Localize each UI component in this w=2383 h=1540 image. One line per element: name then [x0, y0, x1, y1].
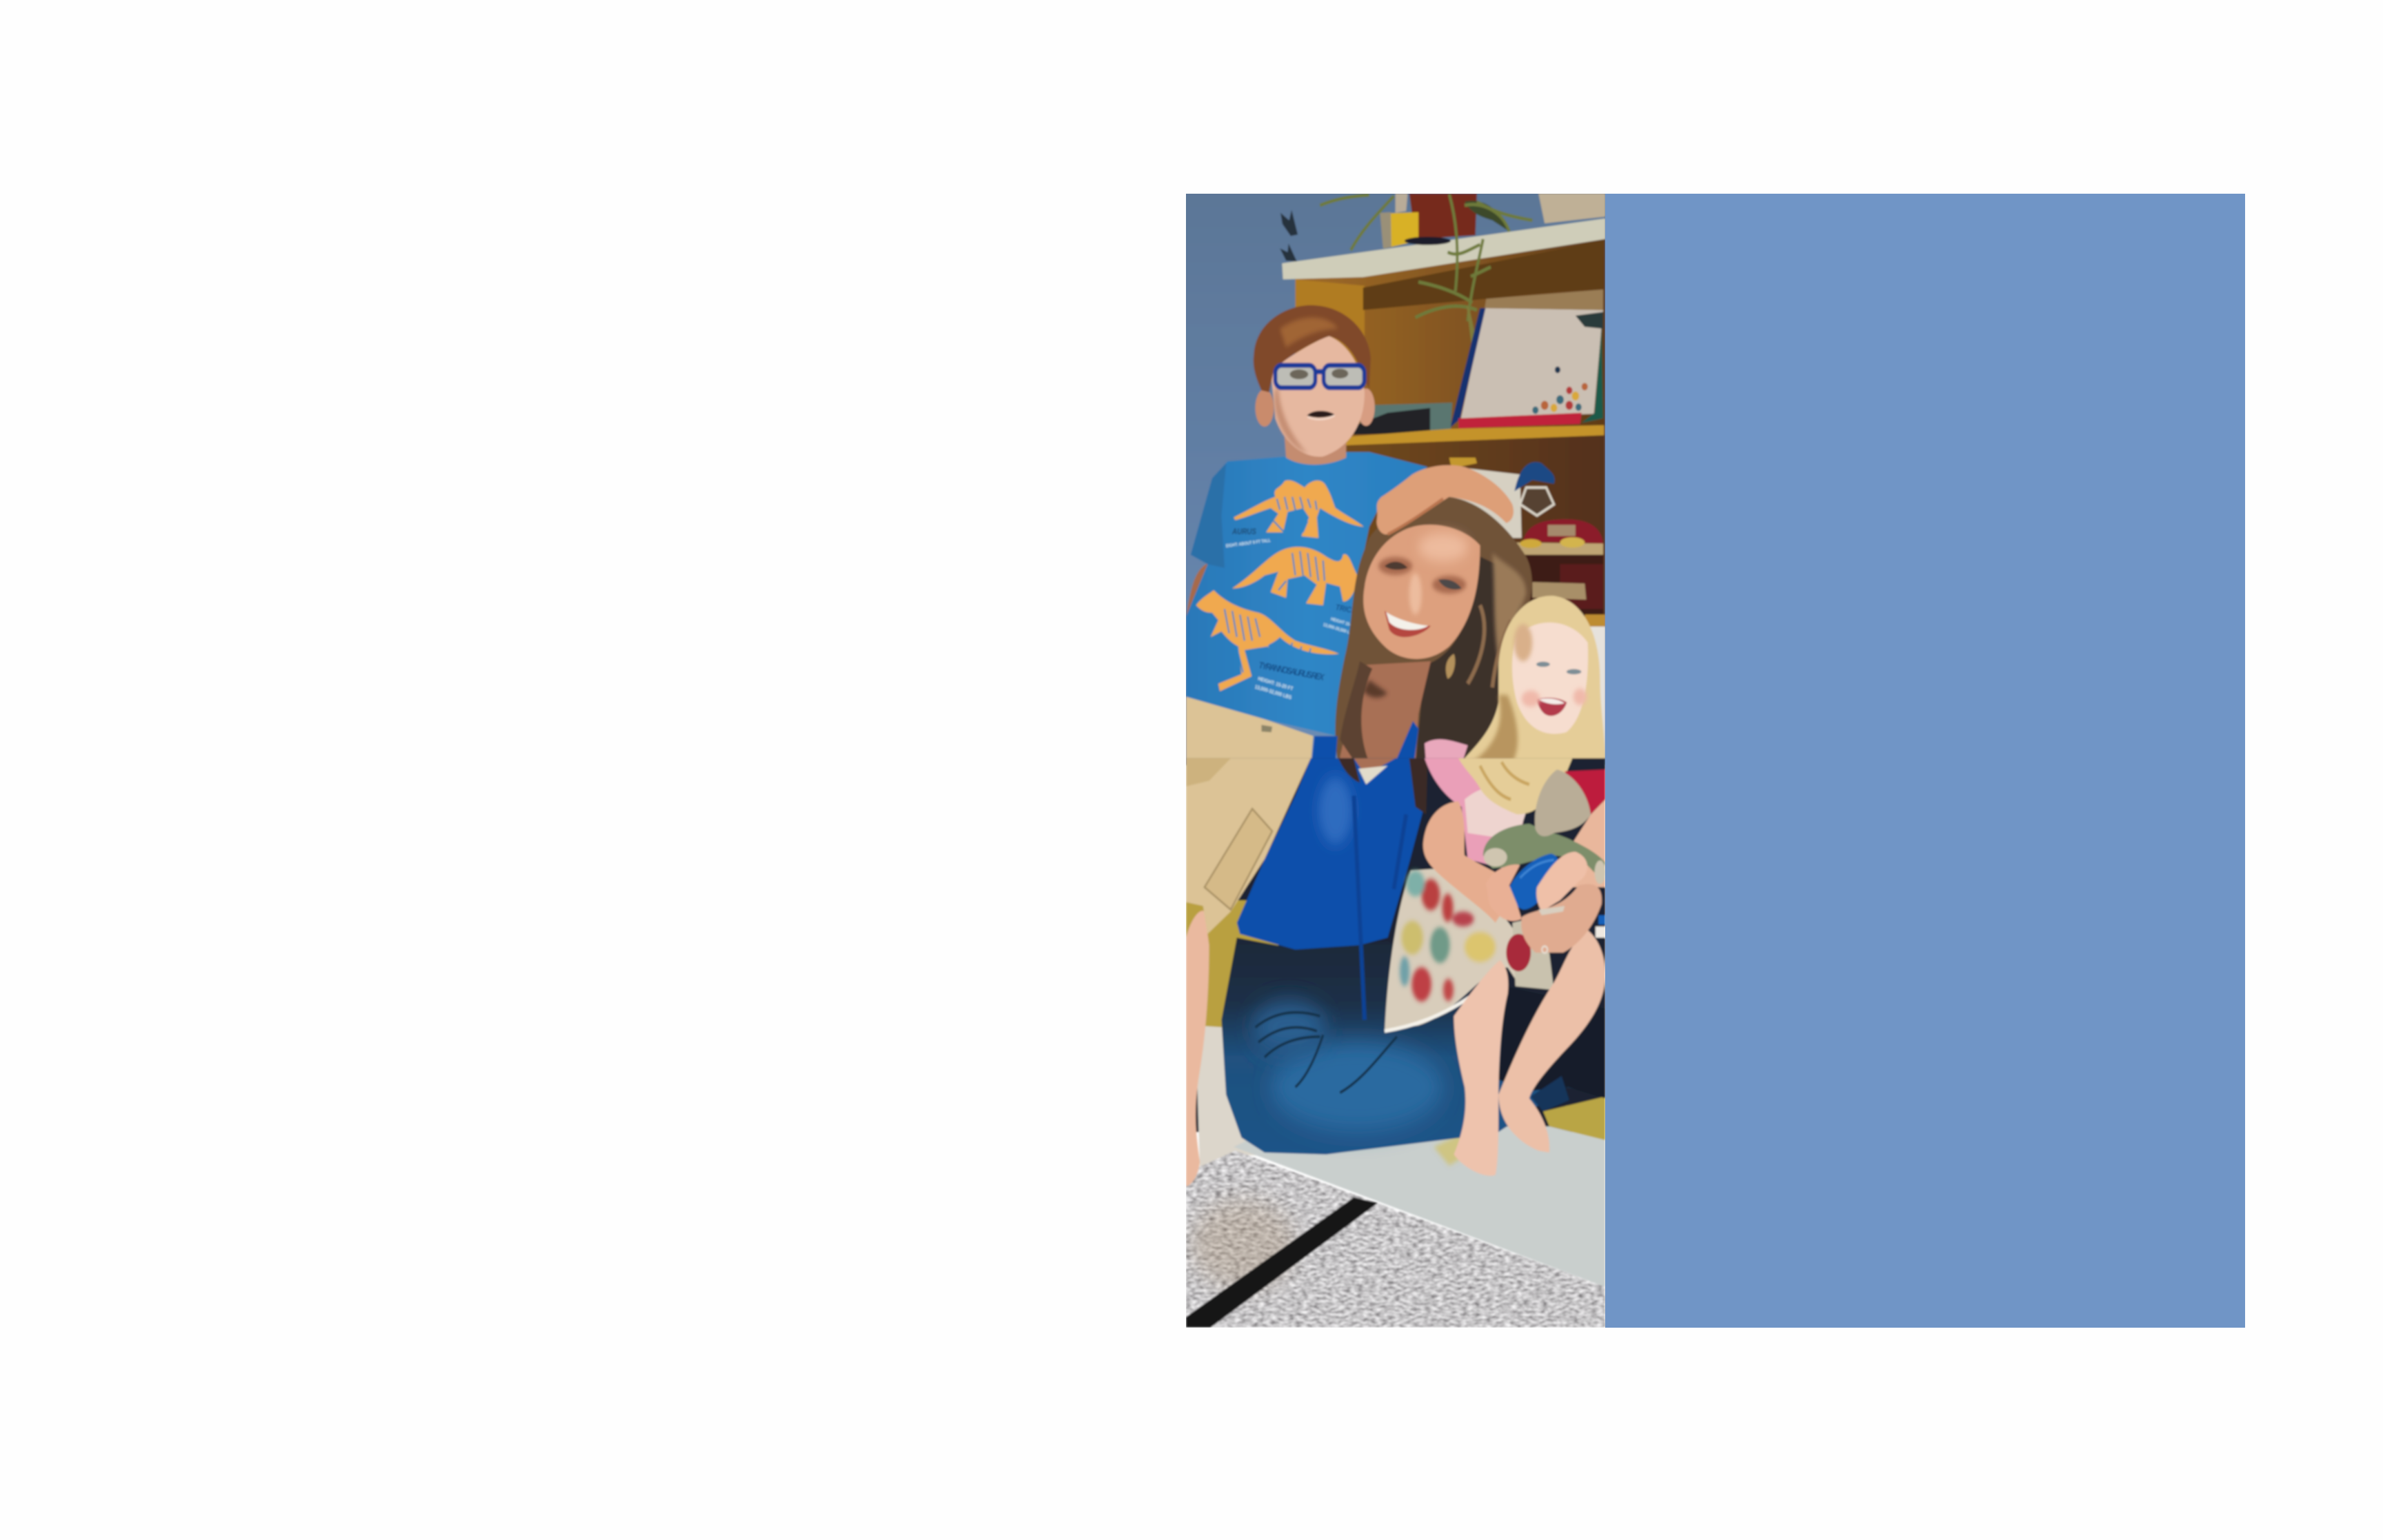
blue toy and hands: [1486, 852, 1605, 953]
mother head and hair: [1335, 497, 1532, 765]
boy: [1186, 305, 1428, 736]
panel: solid blue block: [1605, 194, 2245, 1328]
girl legs and feet: [1454, 930, 1605, 1176]
shirt text: TRICERATOPS: [1335, 603, 1384, 621]
shirt text: [1231, 527, 1384, 683]
photo: mother with two children in front of a shelf: [1186, 194, 1605, 1328]
plush toy and red cloth: [1483, 769, 1606, 887]
shirt small print: EIGHT: ABOUT 9 FT TALL: [1226, 538, 1271, 549]
rug with stripe: [1186, 1151, 1605, 1328]
boy shorts, lower, and leg: [1186, 758, 1311, 1186]
shirt small print: [1226, 538, 1360, 701]
shirt small print: 13,000-32,000 LBS: [1254, 685, 1292, 701]
girl hair curls, lower: [1458, 758, 1572, 814]
shirt small print: 13,000-26,500 LBS: [1323, 623, 1355, 637]
dark area behind figures and floor: [1186, 758, 1605, 1287]
shirt text: AURUS: [1231, 527, 1257, 536]
wall and shelving unit: [1186, 194, 1605, 767]
girl dress: [1385, 758, 1554, 1031]
mother jeans: [1221, 938, 1605, 1155]
shirt graphic: dinosaur skeletons: [1196, 480, 1364, 691]
shirt small print: HEIGHT: 15-20 FT: [1258, 676, 1294, 692]
icon: dinosaur footprints on wall: [1280, 210, 1298, 261]
shelf board and toys: [1345, 425, 1604, 555]
shirt text: TYRANNOSAURUS REX: [1258, 660, 1325, 683]
girl arm: [1423, 801, 1505, 923]
shirt small print: HEIGHT 15-10 FT: [1330, 617, 1360, 631]
mother blouse: [1237, 758, 1428, 1020]
blouse neckline: [1311, 721, 1418, 765]
objects on the top shelf: [1320, 194, 1605, 344]
girl head and hair: [1425, 596, 1605, 765]
boy arm and hand: [1377, 465, 1514, 534]
box on the middle shelf: [1354, 403, 1452, 435]
game board on the middle shelf: [1450, 308, 1603, 429]
boy shorts, upper: [1186, 697, 1313, 765]
